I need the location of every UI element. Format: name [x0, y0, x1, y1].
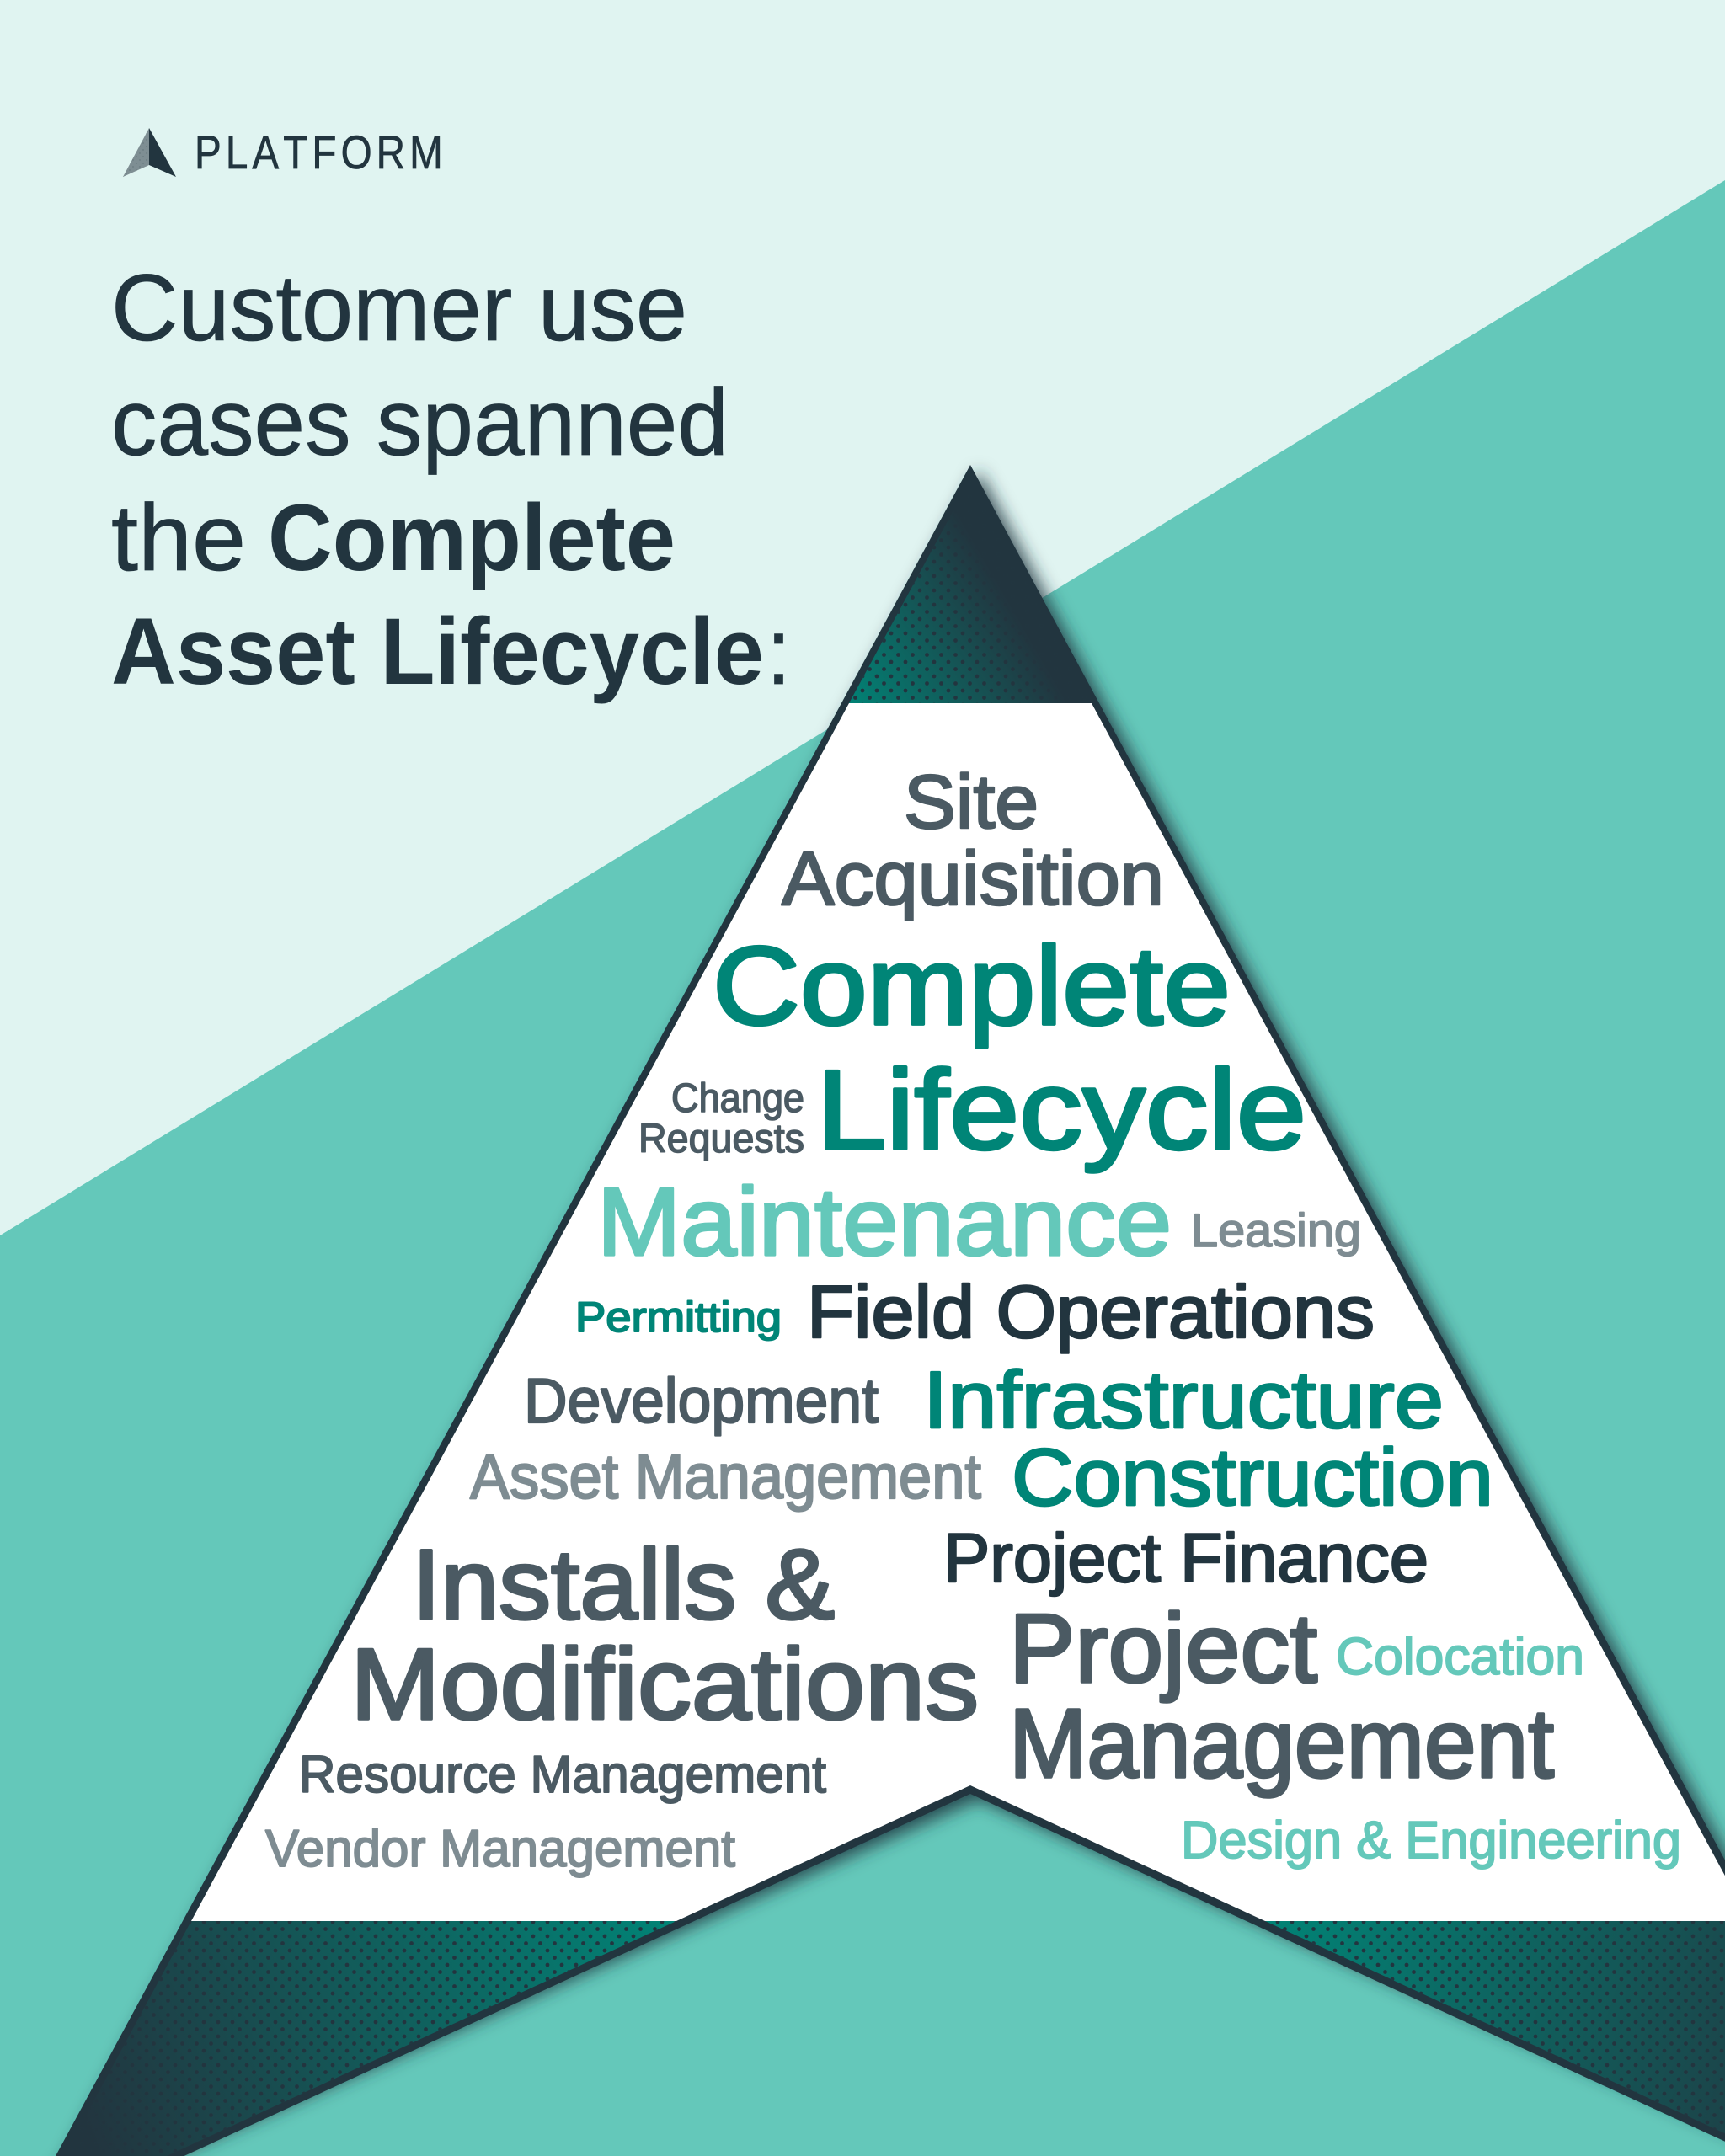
word: Project Finance: Project Finance: [943, 1520, 1429, 1597]
word: Installs & Modifications: Installs &: [412, 1529, 835, 1641]
word cloud: [265, 760, 1681, 1878]
word: Complete Lifecycle: Complete: [713, 924, 1231, 1048]
title: the: [111, 485, 246, 590]
word: Change Requests: Change: [671, 1076, 804, 1121]
word: Construction: Construction: [1012, 1433, 1493, 1523]
word: Leasing: Leasing: [1191, 1203, 1361, 1257]
word: Resource Management: Resource Management: [299, 1746, 826, 1804]
word: Field Operations: Field Operations: [807, 1270, 1375, 1353]
word: Infrastructure: Infrastructure: [923, 1355, 1444, 1445]
arrow bottom-right band: [1265, 1921, 1725, 2156]
word: Project Management: Project: [1009, 1593, 1317, 1703]
word: Development: Development: [524, 1365, 879, 1436]
word: Change Requests: [638, 1076, 804, 1161]
title: Complete: [268, 485, 676, 590]
word: Design & Engineering: Design & Engineering: [1181, 1812, 1681, 1870]
word: Installs & Modifications: [350, 1529, 979, 1741]
title: :: [766, 599, 791, 704]
word: Complete Lifecycle: [713, 924, 1306, 1173]
arrow bottom-left band: [64, 1921, 676, 2156]
title: [111, 255, 791, 704]
arrow top band: [849, 479, 1092, 703]
word: Asset Management: Asset Management: [470, 1441, 981, 1512]
arrow white panel: [191, 703, 1725, 1921]
word: Project Management: [1009, 1593, 1554, 1798]
word: Maintenance: Maintenance: [597, 1169, 1172, 1276]
word: Complete Lifecycle: Lifecycle: [816, 1048, 1306, 1173]
icon: platform arrow: [123, 128, 176, 177]
word: Change Requests: Requests: [638, 1117, 804, 1161]
arrow shape shadow: [8, 471, 1725, 2156]
title: cases spanned: [111, 370, 729, 475]
title: Asset Lifecycle: [111, 599, 764, 704]
title: Customer use: [111, 255, 687, 360]
word: Site Acquisition: Site: [904, 760, 1039, 845]
word: Permitting: Permitting: [575, 1294, 782, 1341]
word: Colocation: Colocation: [1336, 1628, 1584, 1686]
word: Site Acquisition: [782, 760, 1164, 921]
word: Vendor Management: Vendor Management: [265, 1820, 735, 1878]
word: Project Management: Management: [1009, 1689, 1554, 1798]
logo: Platform: [123, 126, 447, 179]
arrow outline: [56, 465, 1725, 2156]
logo wordmark: PLATFORM: [195, 126, 447, 179]
word: Installs & Modifications: Modifications: [350, 1628, 979, 1741]
word: Site Acquisition: Acquisition: [782, 837, 1164, 921]
